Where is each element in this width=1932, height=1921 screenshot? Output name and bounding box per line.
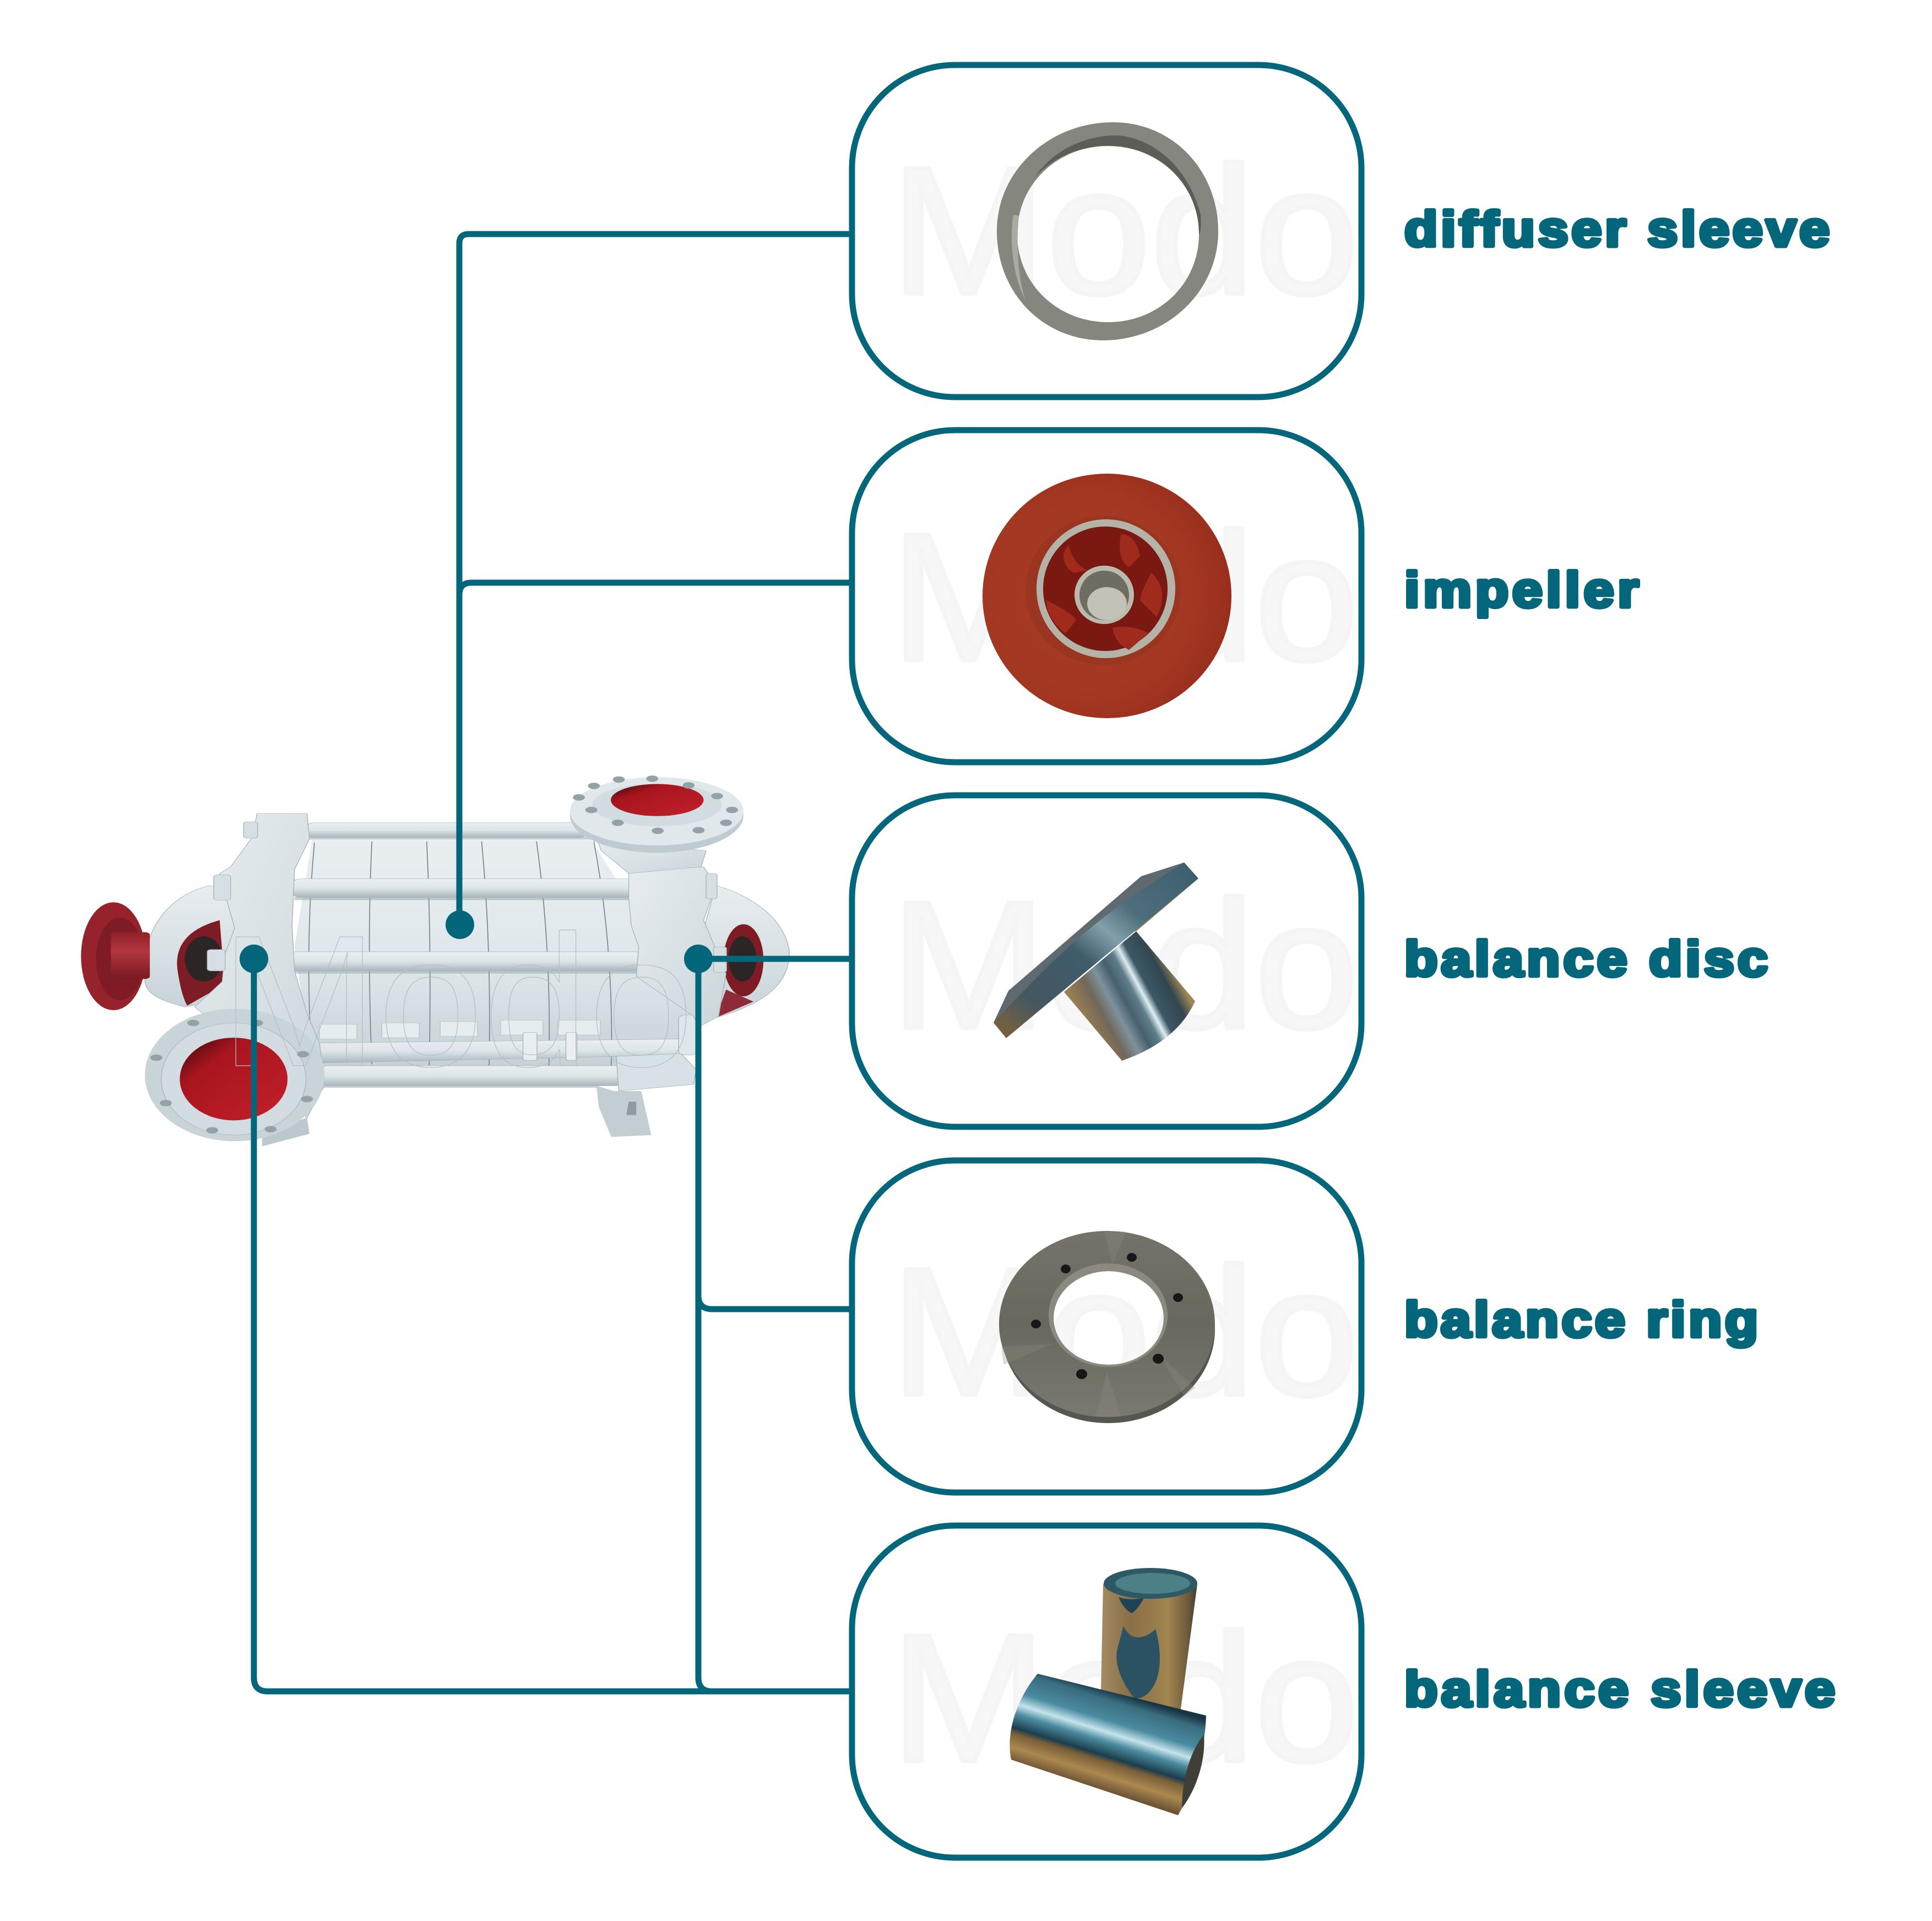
pump watermark: Modo: [220, 897, 694, 1106]
right bracket and foot: [596, 1054, 696, 1137]
panel: impeller: [852, 430, 1361, 762]
discharge neck: [596, 838, 706, 873]
marker dot: right: [684, 945, 713, 973]
connector: right dot to balance disc: [698, 956, 852, 962]
right bearing window: [716, 924, 763, 1018]
left casing: [195, 813, 324, 1117]
left bearing window: [177, 920, 225, 1006]
pump illustration: [81, 775, 789, 1146]
suction flange: [145, 1009, 324, 1141]
label: diffuser sleeve: diffuser sleeve: [1404, 202, 1830, 257]
connector: pump body to diffuser sleeve: [459, 234, 852, 925]
panel: balance ring: [852, 1160, 1361, 1493]
connector: left dot to balance sleeve: [254, 959, 852, 1691]
panel: balance ring: Modo: [891, 1230, 1359, 1433]
connector: right dot to balance sleeve: [698, 1295, 852, 1691]
label: balance sleeve: balance sleeve: [1404, 1662, 1835, 1717]
panel: impeller: Modo: [891, 495, 1359, 698]
hand wheel: [81, 902, 146, 1010]
label: impeller: impeller: [1404, 562, 1639, 618]
panel: balance disc: Modo: [891, 863, 1359, 1066]
rod contact shadows: [292, 837, 639, 1088]
panel: balance sleeve: [852, 1526, 1361, 1858]
pump barrel: [295, 840, 696, 1067]
panel: diffuser sleeve: Modo: [891, 129, 1359, 332]
marker dot: pump body: [446, 910, 474, 939]
marker dot: left: [240, 945, 268, 973]
connector: pump body to impeller: [459, 583, 852, 595]
hand wheel shaft: [111, 932, 150, 979]
panel: balance sleeve: Modo: [891, 1596, 1359, 1799]
panel: balance disc: [852, 795, 1361, 1127]
right casing: [629, 867, 726, 1027]
left foot: [262, 1117, 310, 1146]
left bearing housing: [145, 886, 240, 1007]
stage feet blocks: [319, 1021, 600, 1039]
balance pipe: [317, 1015, 698, 1063]
connector: right dot to balance ring: [698, 959, 852, 1309]
label: balance disc: balance disc: [1404, 931, 1768, 987]
label: balance ring: balance ring: [1404, 1292, 1758, 1348]
right bearing housing: [698, 886, 789, 1018]
barrel segments: [309, 842, 611, 1066]
panel: diffuser sleeve: [852, 65, 1361, 397]
casing bolts: [207, 822, 726, 972]
tie rods: [290, 823, 641, 1086]
discharge flange: [570, 775, 744, 853]
